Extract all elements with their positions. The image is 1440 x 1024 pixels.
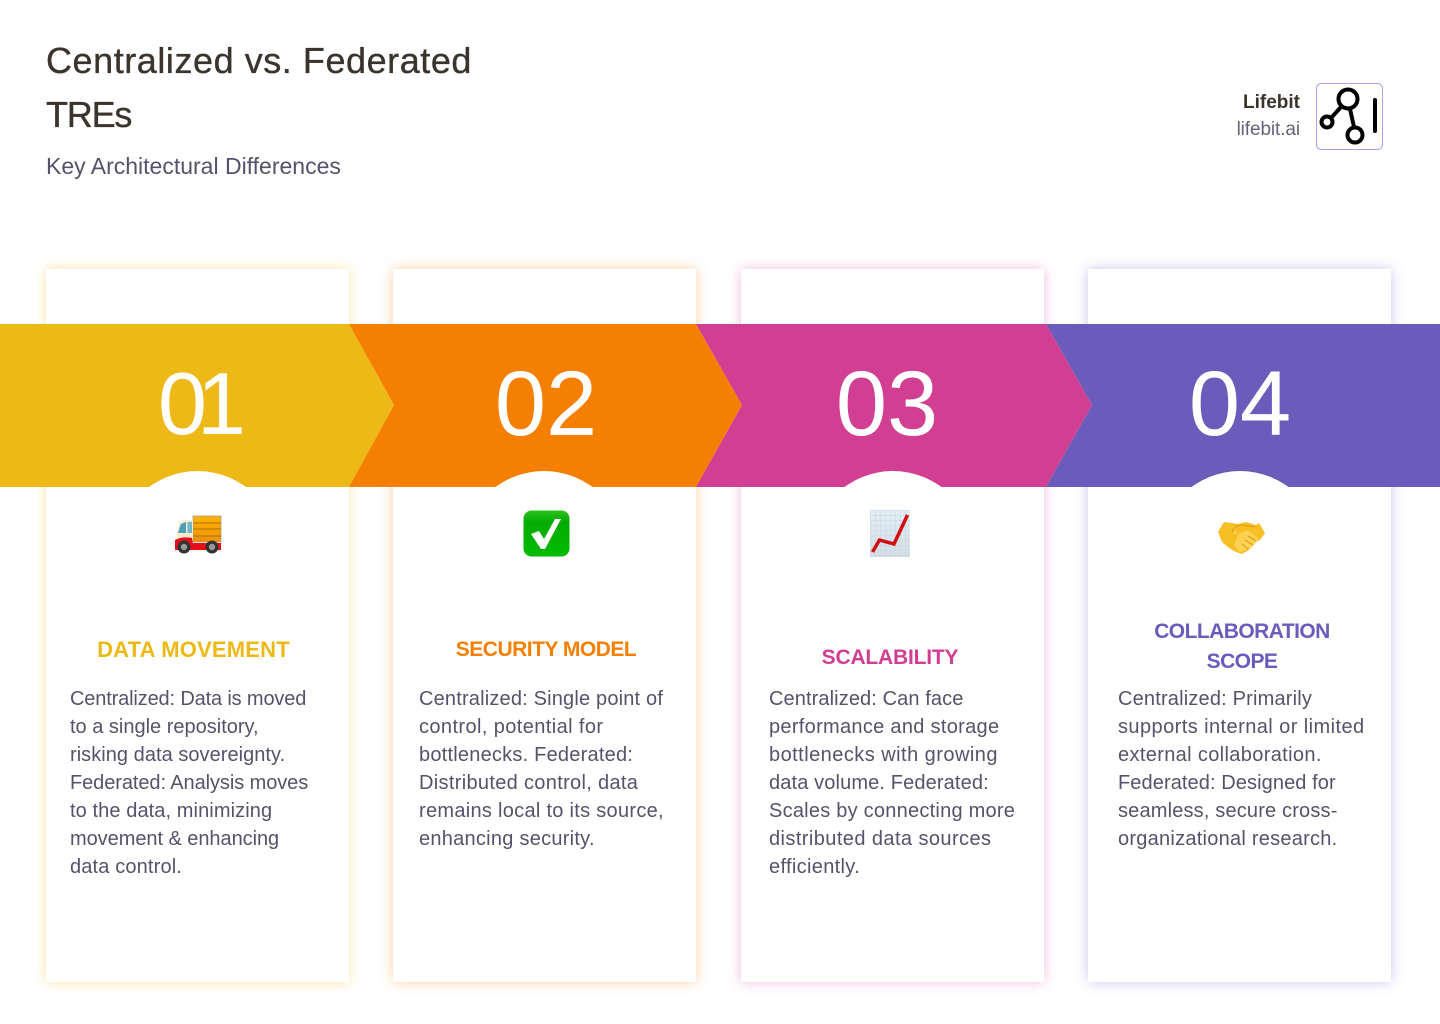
brand url: lifebit.ai bbox=[1237, 119, 1300, 140]
panel: card 4 bbox=[1088, 269, 1391, 982]
heading: collaboration scope: SCOPE bbox=[1207, 650, 1277, 673]
text: collaboration scope: supports internal or limited bbox=[1118, 716, 1365, 738]
text: collaboration scope bbox=[1118, 688, 1365, 850]
text: data movement bbox=[70, 688, 308, 878]
panel: card 3 bbox=[741, 269, 1044, 982]
text: scalability: efficiently. bbox=[769, 856, 860, 878]
text: data movement: Centralized: Data is moved bbox=[70, 688, 306, 710]
text: data movement: to a single repository, bbox=[70, 716, 259, 738]
arrow band bbox=[0, 324, 1440, 487]
icon: logo bbox=[1316, 83, 1383, 150]
text: data movement: to the data, minimizing bbox=[70, 800, 272, 822]
text: security model: control, potential for bbox=[419, 716, 603, 738]
icon: handshake bbox=[1218, 522, 1265, 554]
brand name: Lifebit bbox=[1243, 92, 1300, 113]
heading: security model: SECURITY MODEL bbox=[456, 638, 636, 661]
text: collaboration scope: external collaboration. bbox=[1118, 744, 1322, 766]
title: TREs bbox=[46, 94, 131, 135]
panel: card 1 bbox=[46, 269, 349, 982]
text: collaboration scope: seamless, secure cross- bbox=[1118, 800, 1338, 822]
heading: scalability: SCALABILITY bbox=[822, 646, 958, 669]
icon: delivery truck bbox=[175, 516, 222, 554]
heading: data movement: DATA MOVEMENT bbox=[97, 637, 290, 662]
text: collaboration scope: Federated: Designed for bbox=[1118, 772, 1336, 794]
icon: check mark bbox=[524, 510, 570, 556]
heading: collaboration scope bbox=[1154, 620, 1330, 673]
heading: collaboration scope: COLLABORATION bbox=[1154, 620, 1330, 643]
text: security model: Distributed control, data bbox=[419, 772, 638, 794]
title: Centralized vs. Federated bbox=[46, 40, 472, 81]
icon: chart increasing bbox=[870, 510, 910, 557]
text: scalability bbox=[769, 688, 1015, 878]
text: security model: remains local to its source, bbox=[419, 800, 664, 822]
text: data movement: risking data sovereignty. bbox=[70, 744, 285, 766]
text: collaboration scope: Centralized: Primarily bbox=[1118, 688, 1312, 710]
text: scalability: data volume. Federated: bbox=[769, 772, 989, 794]
text: data movement: Federated: Analysis moves bbox=[70, 772, 308, 794]
text: scalability: distributed data sources bbox=[769, 828, 991, 850]
subtitle: Key Architectural Differences bbox=[46, 153, 341, 179]
text: scalability: Centralized: Can face bbox=[769, 688, 963, 710]
text: security model: bottlenecks. Federated: bbox=[419, 744, 633, 766]
text: data movement: data control. bbox=[70, 856, 182, 878]
text: scalability: Scales by connecting more bbox=[769, 800, 1015, 822]
text: data movement: movement & enhancing bbox=[70, 828, 279, 850]
text: security model: enhancing security. bbox=[419, 828, 595, 850]
text: security model: Centralized: Single point of bbox=[419, 688, 663, 710]
text: scalability: performance and storage bbox=[769, 716, 999, 738]
number 04: 04 bbox=[1189, 353, 1291, 455]
title bbox=[46, 40, 472, 135]
number 01: 01 bbox=[158, 354, 236, 453]
number 03: 03 bbox=[836, 353, 938, 455]
text: collaboration scope: organizational research. bbox=[1118, 828, 1337, 850]
panel: card 2 bbox=[393, 269, 696, 982]
text: security model bbox=[419, 688, 664, 850]
number 02: 02 bbox=[495, 353, 597, 455]
text: scalability: bottlenecks with growing bbox=[769, 744, 998, 766]
